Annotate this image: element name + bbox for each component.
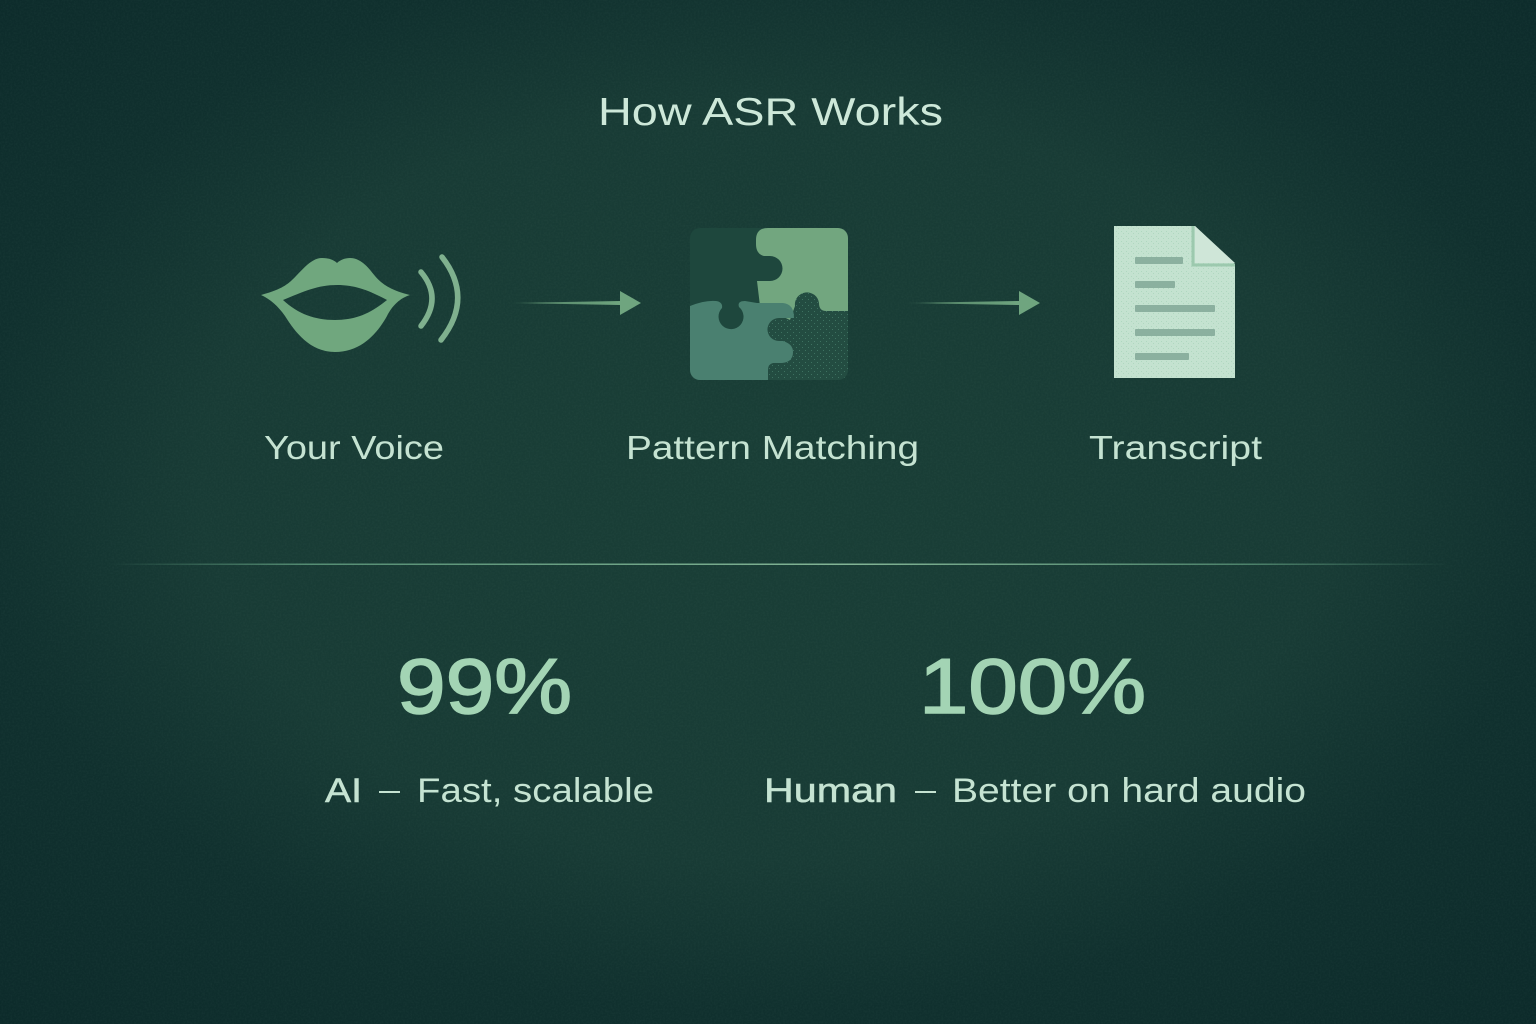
title: How ASR Works: [598, 91, 943, 134]
label: human better on hard audio: Better on hard audio: [952, 772, 1306, 810]
step 1: your voice: [261, 257, 458, 466]
arrow: voice to pattern matching: [505, 291, 641, 315]
label: human better on hard audio: [764, 772, 1306, 810]
stat: human: [764, 642, 1306, 810]
label: AI fast, scalable: [325, 772, 654, 810]
icon: speaking lips: [261, 258, 410, 352]
icon: sound waves: [421, 257, 458, 340]
stat: AI: [325, 642, 654, 810]
label: transcript: Transcript: [1089, 429, 1262, 466]
step 2: pattern matching: [626, 228, 919, 466]
step 3: transcript: [1089, 226, 1262, 466]
label: human better on hard audio: Human: [764, 772, 897, 810]
number: 99%: 99%: [397, 642, 572, 730]
arrow: pattern matching to transcript: [903, 291, 1040, 315]
label: AI fast, scalable: AI: [325, 772, 362, 810]
icon: puzzle: [690, 228, 848, 380]
label: AI fast, scalable: Fast, scalable: [417, 772, 654, 810]
label: pattern matching: Pattern Matching: [626, 429, 919, 466]
number: 100%: 100%: [919, 642, 1146, 730]
label: your voice: Your Voice: [264, 429, 444, 466]
icon: document: [1114, 226, 1235, 378]
